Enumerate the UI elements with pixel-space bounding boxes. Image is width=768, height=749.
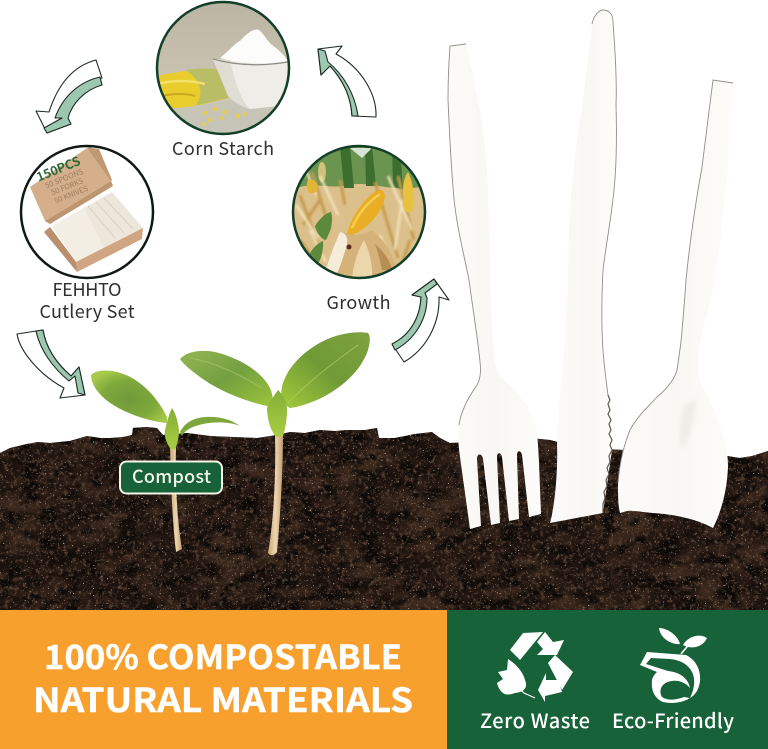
circle: corn starch bbox=[155, 0, 291, 136]
soil ground bbox=[0, 425, 768, 611]
icon: recycling leaf bbox=[497, 632, 573, 702]
circle: corn growth bbox=[293, 146, 425, 280]
label: FEHHTO Cutlery Set: Cutlery Set bbox=[40, 298, 135, 324]
spoon bbox=[618, 80, 733, 528]
circle: cutlery box bbox=[20, 146, 154, 278]
headline text: NATURAL MATERIALS bbox=[33, 674, 413, 722]
arrow: corn starch to cutlery bbox=[36, 60, 102, 133]
icon: eco sprout bbox=[640, 628, 707, 703]
circle: cutlery box: 50 SPOONS bbox=[43, 166, 85, 191]
circle: cutlery box: 150PCS bbox=[33, 150, 83, 185]
label: Zero Waste: Zero Waste bbox=[480, 705, 590, 734]
arrow: cutlery to compost bbox=[17, 330, 85, 398]
badge: Compost bbox=[120, 462, 222, 494]
knife bbox=[550, 10, 616, 523]
label: FEHHTO Cutlery Set bbox=[40, 276, 135, 324]
label: Corn Starch: Corn Starch bbox=[172, 135, 274, 161]
panel: green benefits bbox=[447, 610, 768, 749]
arrow: compost to growth bbox=[392, 279, 449, 362]
circle: cutlery box: 50 FORKS bbox=[49, 175, 85, 198]
plant: small seedling bbox=[91, 370, 240, 552]
fork bbox=[448, 44, 541, 529]
label: FEHHTO Cutlery Set: FEHHTO bbox=[52, 276, 122, 302]
circle: cutlery box: 50 KNIVES bbox=[52, 183, 90, 206]
plant: tall seedling bbox=[180, 332, 370, 555]
panel: orange headline bbox=[0, 610, 447, 749]
label: Growth: Growth bbox=[326, 289, 390, 315]
badge: Compost: Compost bbox=[132, 463, 211, 489]
label: Eco-Friendly: Eco-Friendly bbox=[612, 705, 734, 734]
headline text: 100% COMPOSTABLE bbox=[44, 631, 402, 679]
headline text bbox=[33, 631, 413, 722]
arrow: growth to corn starch bbox=[318, 46, 376, 117]
